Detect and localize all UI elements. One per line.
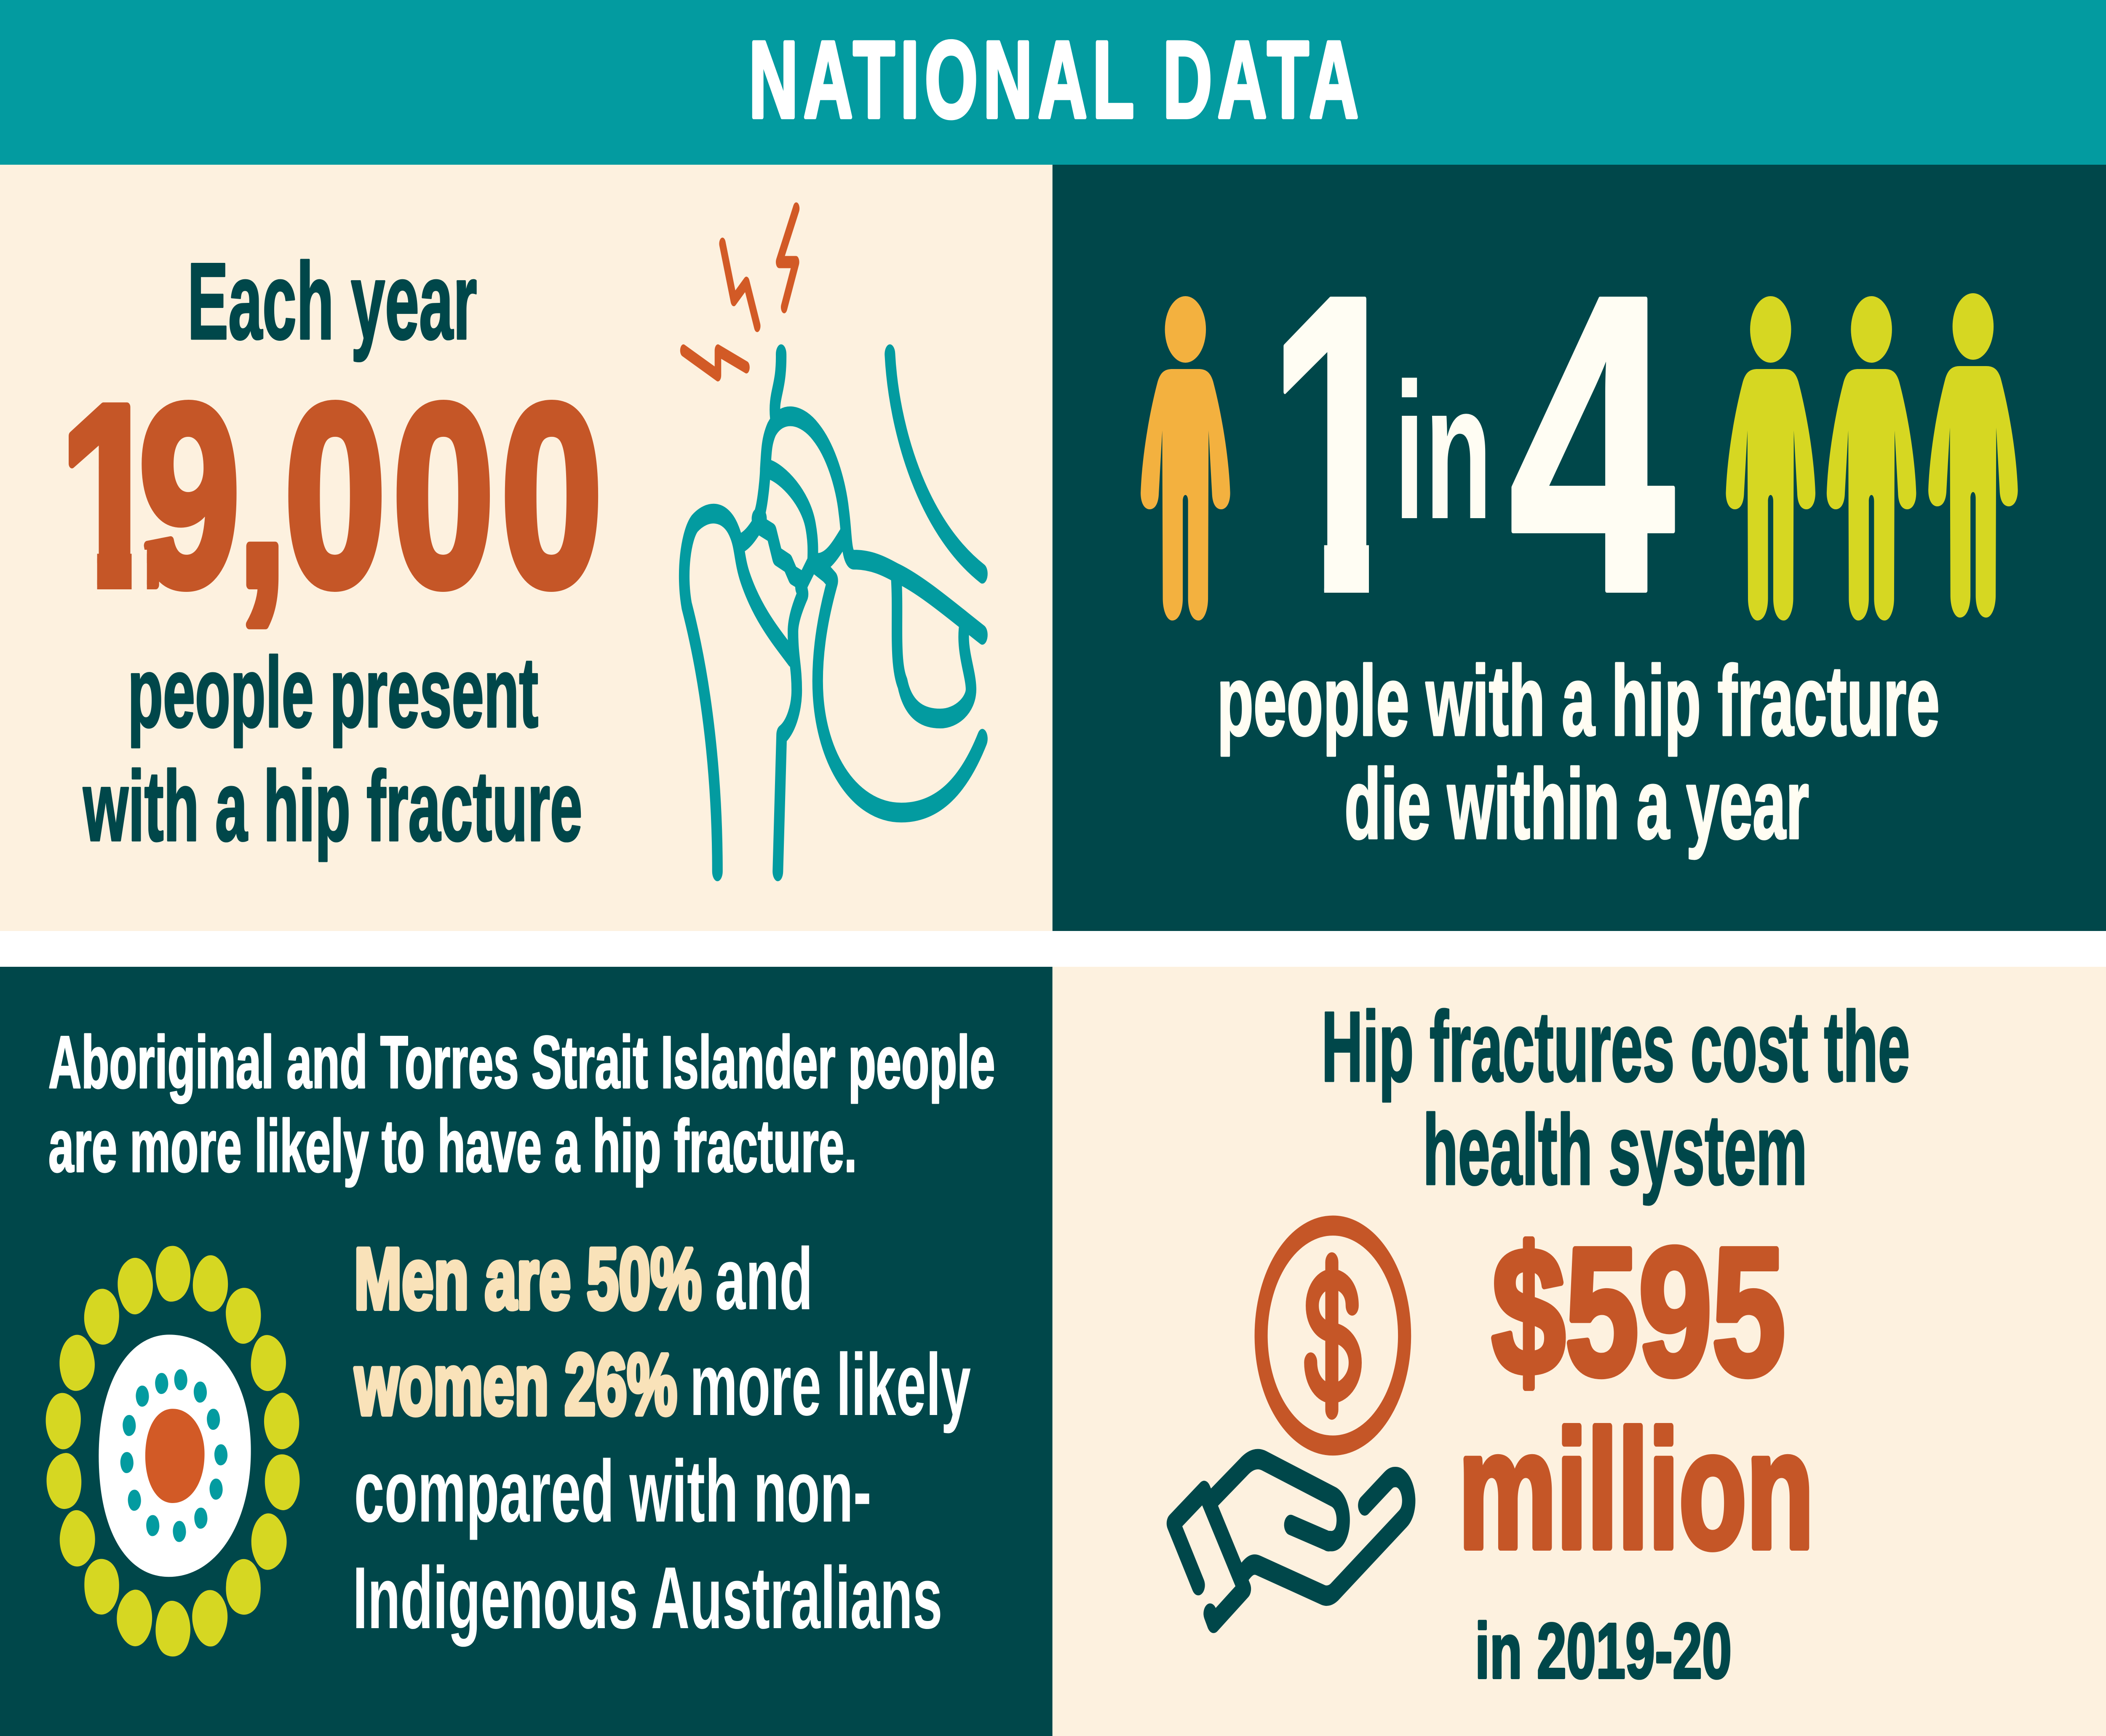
orange core (145, 1409, 205, 1503)
text: more likely intro: are more likely to have a hip fracture. (48, 1105, 857, 1188)
panel: 19,000 people each year (0, 165, 1053, 931)
heading: hip fractures cost the health system (1322, 991, 1910, 1205)
stat: $595 million (1458, 1210, 1814, 1583)
big number: 19,000: 19,000 (59, 352, 602, 640)
text: men and women statistics (353, 1230, 971, 1647)
panel: Aboriginal and Torres Strait Islander people (0, 967, 1053, 1736)
stat: 1 in 4: 1 (1267, 207, 1414, 680)
icon: hip bones (684, 354, 982, 871)
icon: pain bolts (684, 209, 796, 375)
text: men and women statistics: Indigenous Australians (353, 1549, 943, 1647)
text: in 2019-20: in 2019-20 (1475, 1607, 1732, 1695)
text: people present with a hip fracture: people present (128, 637, 538, 748)
stat: 1 in 4: 4 (1508, 207, 1677, 680)
teal dots (120, 1369, 227, 1542)
text: more likely intro (48, 1021, 995, 1188)
text: men and women statistics: more likely (690, 1335, 971, 1434)
stat: 1 in 4: in (1394, 343, 1492, 559)
text: men and women statistics: Men are 50% (354, 1230, 702, 1327)
icon: hip joint with pain bolts (684, 209, 982, 871)
text: people present with a hip fracture (83, 637, 582, 861)
stat: $595 million: million (1458, 1396, 1814, 1583)
icon: hand holding coin (1173, 1225, 1409, 1623)
text: people with a hip fracture die within a year (1217, 645, 1940, 859)
header banner (0, 0, 2106, 165)
stat: $595 million: $595 (1492, 1210, 1785, 1412)
icon: three yellow people (1726, 293, 2018, 621)
heading: each year: Each year (187, 240, 477, 362)
text: more likely intro: Aboriginal and Torres Strait Islander people (48, 1021, 995, 1104)
text: men and women statistics: women 26% (355, 1336, 677, 1433)
text: men and women statistics: compared with non- (354, 1442, 871, 1540)
text: men and women statistics: and (715, 1230, 813, 1328)
icon: dot painting circle (39, 1245, 305, 1663)
white centre (99, 1335, 251, 1577)
icon: dollar coin (1261, 1225, 1405, 1445)
heading: hip fractures cost the health system: health system (1423, 1094, 1807, 1205)
stat: 1 in 4 (1283, 297, 1675, 593)
icon: hand (1173, 1459, 1409, 1623)
text: people with a hip fracture die within a year: people with a hip fracture (1217, 645, 1940, 756)
outer yellow dots (39, 1245, 305, 1663)
title: NATIONAL DATA (749, 19, 1358, 140)
icon: orange person (1141, 296, 1230, 621)
panel: 1 in 4 (1053, 165, 2106, 931)
heading: hip fractures cost the health system: Hip fractures cost the (1322, 991, 1910, 1102)
text: people present with a hip fracture: with a hip fracture (83, 751, 583, 861)
text: people with a hip fracture die within a year: die within a year (1344, 749, 1809, 859)
panel: cost to health system (1053, 967, 2106, 1736)
